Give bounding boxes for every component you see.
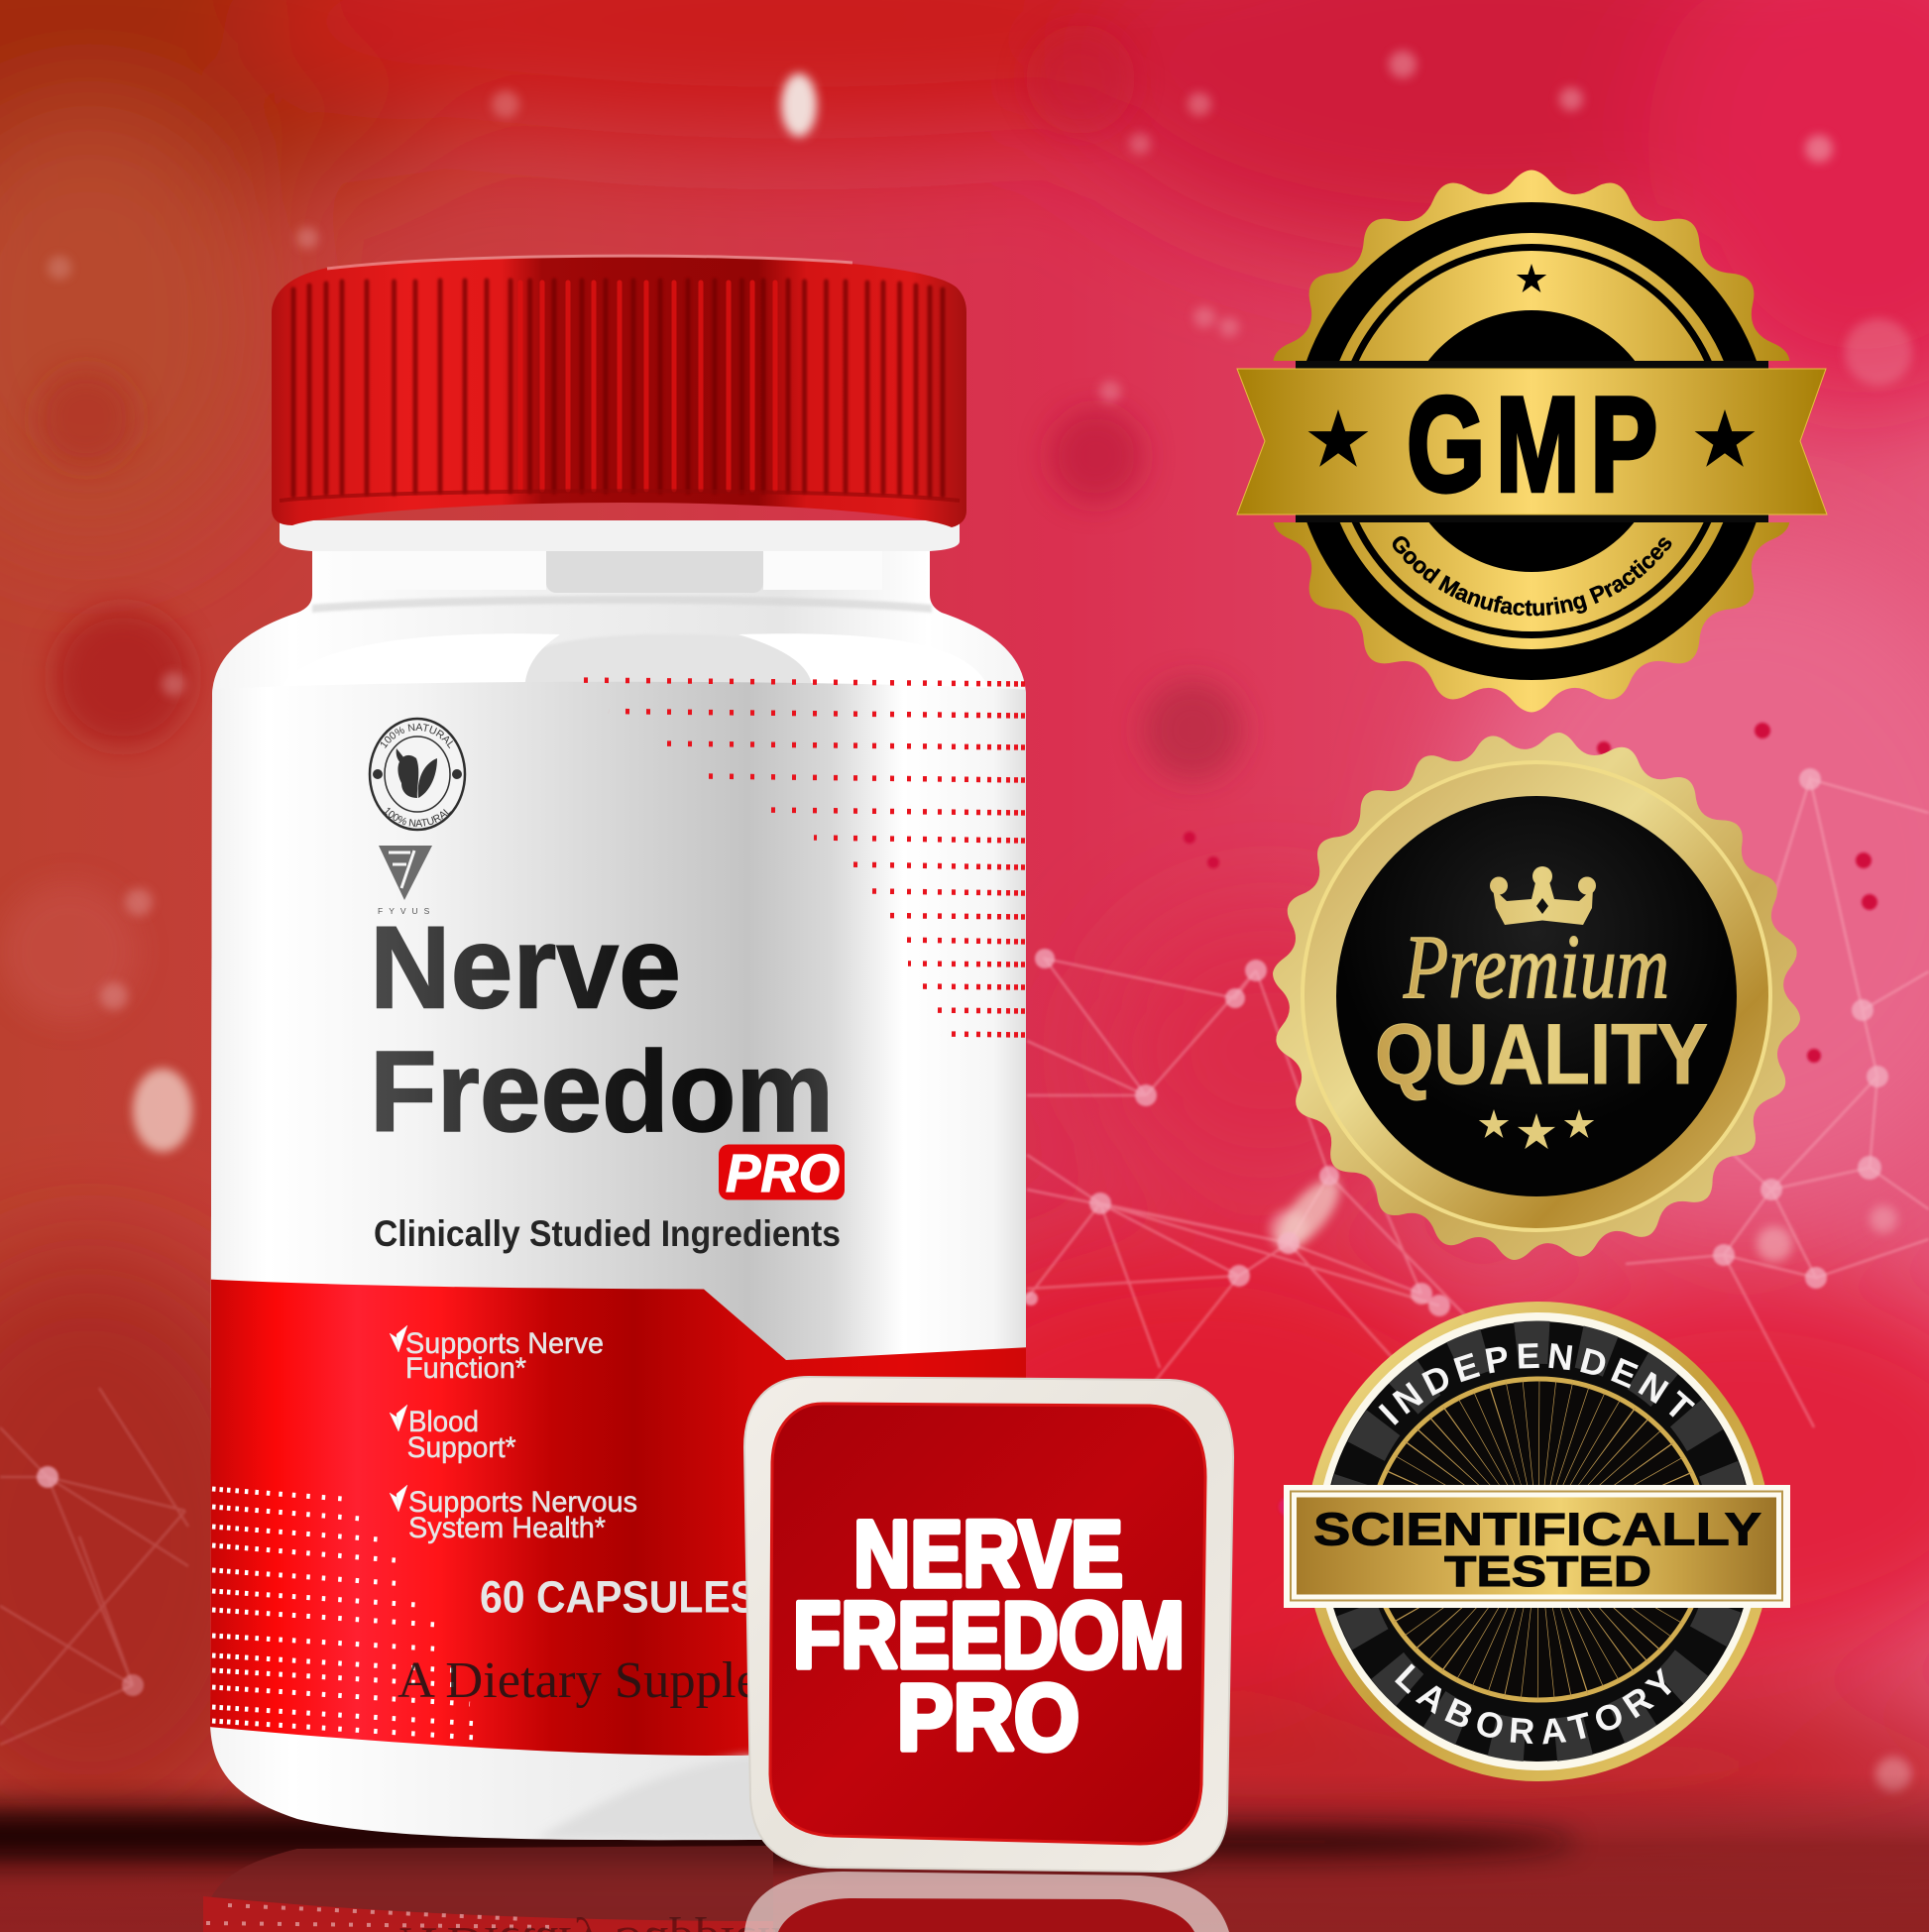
benefit list: Support* [407,1431,516,1464]
benefit list: Supports Nervous [408,1486,637,1519]
background: network of lines [0,779,1929,1745]
subtitle: Clinically Studied Ingredients [374,1213,841,1254]
lab rays [1449,1450,1628,1629]
lab banner text [1313,1503,1761,1596]
box text: FREEDOM [793,1583,1185,1688]
dot pattern: white triangles bottom left [212,1489,487,1739]
bottle [210,254,1080,1872]
GMP ribbon [1237,369,1827,514]
box red panel [770,1404,1205,1844]
product box [744,1377,1233,1872]
benefit list: Supports Nerve [405,1327,604,1360]
title: Nerve Freedom: Nerve [370,902,681,1033]
bottom bottle shading [546,1749,758,1840]
collar [280,520,960,551]
box reflection [744,1872,1229,1932]
good manufacturing practices: Good Manufacturing Practices [1392,536,1671,617]
badge: 100% natural: 100% NATURAL [384,807,451,827]
box text [793,1502,1185,1770]
white label [198,682,1031,1388]
badge: 100% natural [369,718,466,831]
badge: Premium Quality [1259,719,1814,1274]
box text: PRO [897,1665,1079,1770]
benefit list: Blood [408,1406,479,1438]
icon: check mark one [390,1325,407,1352]
bottle reflection [203,1846,861,1932]
icon: check mark two [390,1405,407,1431]
lab ring segments [1345,1342,1732,1741]
box text: NERVE [853,1502,1123,1607]
floor shadow [0,1774,1929,1932]
lab banner text: SCIENTIFICALLY [1313,1503,1761,1554]
box frame [744,1377,1233,1872]
title: Nerve Freedom: Freedom [370,1027,834,1156]
star right [1695,409,1755,467]
logo: FYVUS [378,846,435,916]
star left [1308,409,1368,467]
badge: 100% natural: 100% NATURAL [381,724,454,749]
logo: FYVUS: FYVUS [378,906,435,916]
quality word: QUALITY [1375,1007,1708,1102]
premium word: Premium [1403,916,1669,1017]
red cap [272,256,966,527]
title: Nerve Freedom [370,902,834,1156]
cap ribs [293,281,943,496]
cap rib highlights [520,283,775,490]
badge: Scientifically Tested [1284,1302,1790,1781]
independent text: INDEPENDENT [1378,1343,1695,1425]
lab banner text: TESTED [1444,1547,1651,1596]
background: network nodes [37,768,1888,1696]
lab outer ring [1305,1302,1771,1781]
lab inner disc [1370,1379,1707,1700]
bottle body [198,531,1041,1844]
neck shading [311,551,932,684]
dietary supplement text: A Dietary Supplement [397,1652,864,1709]
PRO tag: PRO [726,1144,840,1203]
premium seal [1259,719,1814,1274]
GMP seal [1273,170,1790,712]
GMP text: GMP [1407,370,1668,519]
dot pattern: red triangles top right [573,680,1025,1035]
icon: leaves [397,748,437,798]
red label band [198,1279,1031,1756]
badge: GMP [1236,170,1828,712]
benefit list: Function* [405,1352,526,1385]
lab banner [1284,1485,1790,1608]
premium stars [1479,1109,1594,1149]
star top [1517,264,1546,292]
benefit list [390,1325,637,1544]
capsule count: 60 CAPSULES [480,1572,757,1622]
icon: check mark three [390,1485,407,1512]
benefit list: System Health* [408,1512,606,1544]
icon: crown [1490,866,1596,925]
laboratory text: LABORATORY [1395,1663,1671,1745]
